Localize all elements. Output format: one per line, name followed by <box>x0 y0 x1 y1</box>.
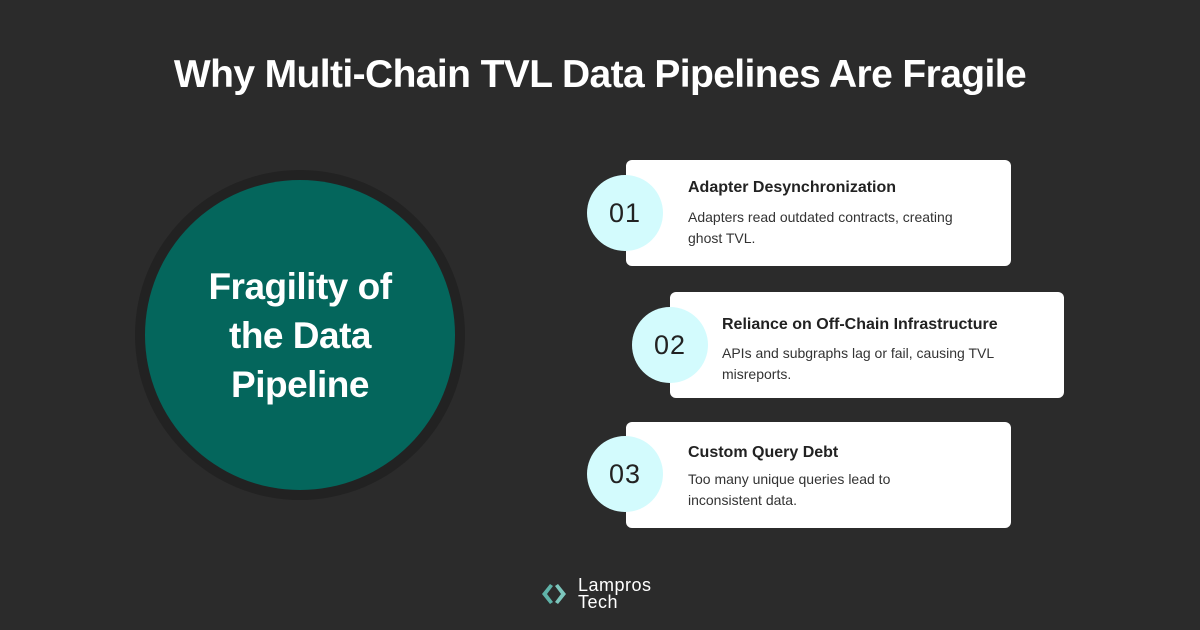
card 2: Reliance on Off-Chain Infrastructure <box>722 316 998 333</box>
card 3: Custom Query Debt <box>688 444 838 461</box>
logo: Lampros <box>578 575 652 595</box>
card 1: ghost TVL. <box>688 230 755 246</box>
number 01: 01 <box>609 198 641 228</box>
number 01 <box>587 175 663 251</box>
logo: Tech <box>578 592 618 612</box>
card 1: Adapters read outdated contracts, creating <box>688 209 953 225</box>
central circle: the Data <box>229 314 371 356</box>
number 03: 03 <box>609 458 641 488</box>
number 03 <box>587 436 663 512</box>
card 3: Too many unique queries lead to <box>688 471 890 487</box>
central circle: Fragility of <box>208 266 392 306</box>
central circle: Pipeline <box>231 364 369 404</box>
card 2: APIs and subgraphs lag or fail, causing TVL <box>722 345 994 361</box>
card 3: inconsistent data. <box>688 492 797 508</box>
card 1 <box>587 160 1011 266</box>
number 02 <box>632 307 708 383</box>
title: Why Multi-Chain TVL Data Pipelines Are Fragile <box>174 53 1026 96</box>
central circle <box>135 170 465 500</box>
card 1: Adapter Desynchronization <box>688 179 896 196</box>
number 02: 02 <box>654 330 686 360</box>
card 2 <box>632 292 1064 398</box>
card 2: misreports. <box>722 366 791 382</box>
card 3 <box>587 422 1011 528</box>
logo <box>542 575 652 612</box>
